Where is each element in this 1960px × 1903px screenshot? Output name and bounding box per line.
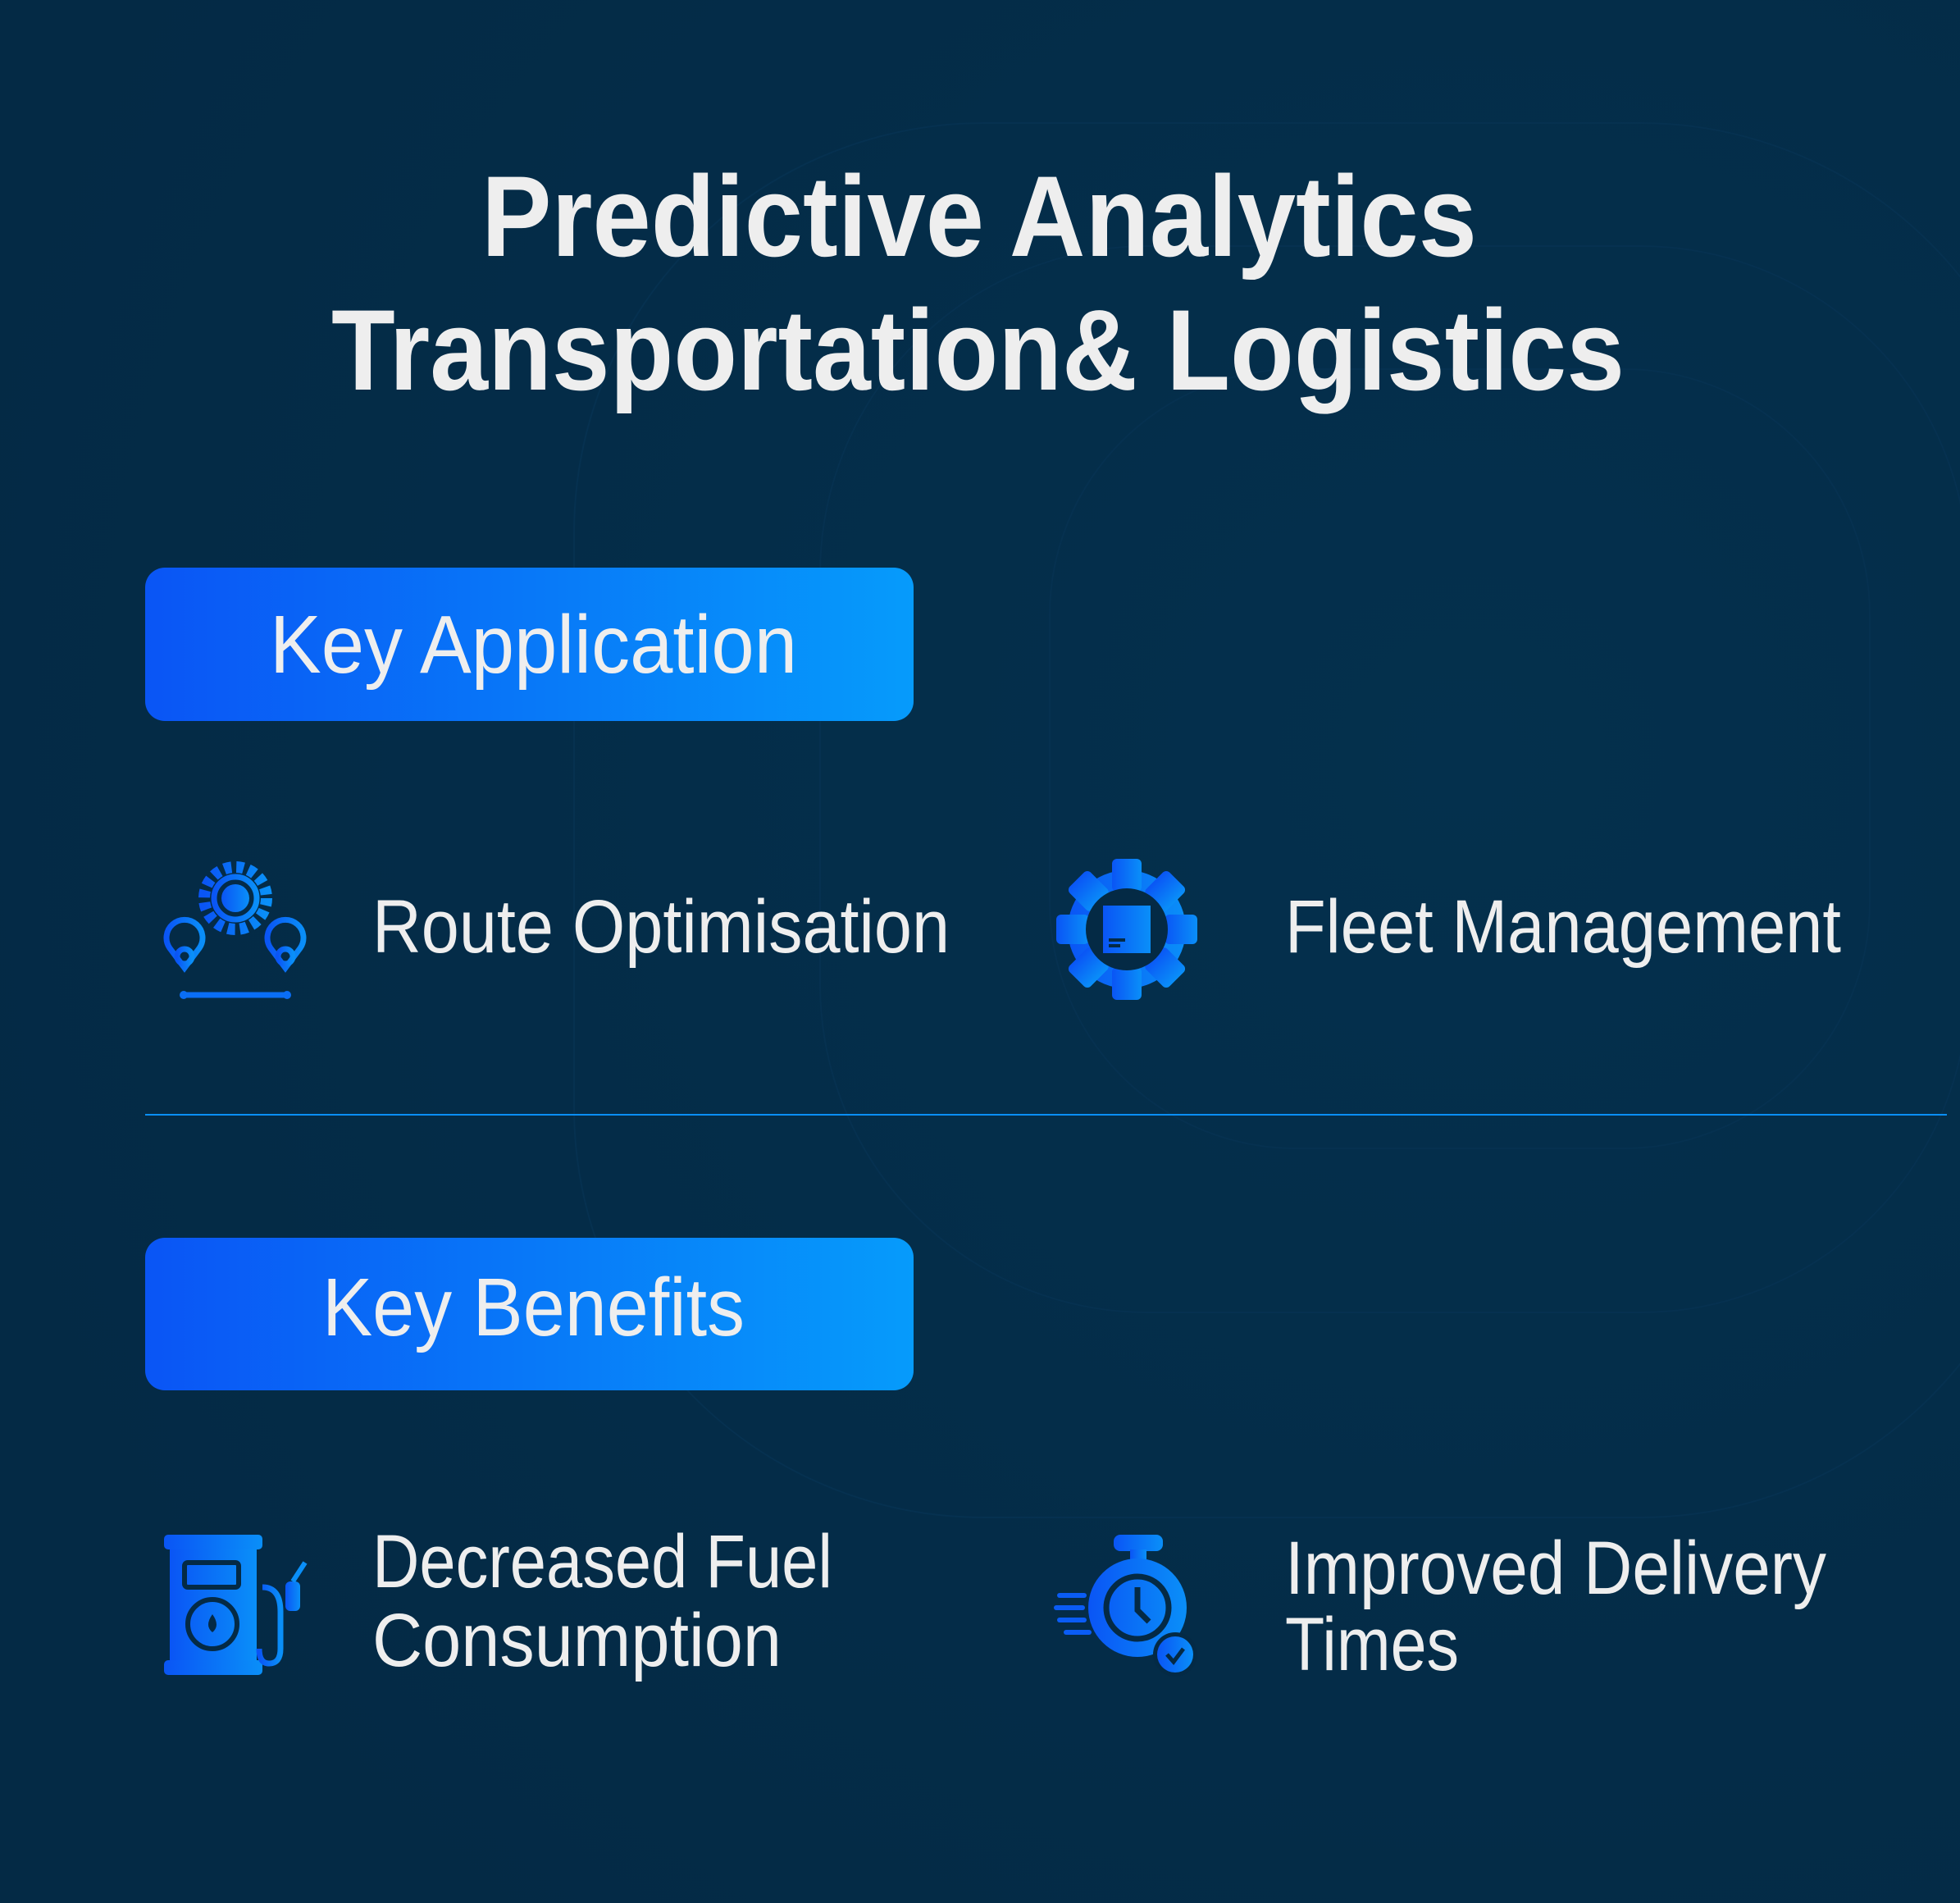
title: Transportation& Logistics bbox=[331, 285, 1625, 414]
text: Improved Delivery Times: Times bbox=[1285, 1603, 1459, 1686]
text: Fleet Management: Fleet Management bbox=[1285, 885, 1841, 969]
icon: stopwatch bbox=[1056, 1535, 1197, 1677]
icon: fleet management gear bbox=[1056, 859, 1197, 1000]
title: Predictive Analytics bbox=[481, 152, 1477, 281]
icon: route optimisation bbox=[166, 867, 303, 999]
text: Decreased Fuel Consumption: Decreased Fuel bbox=[372, 1520, 832, 1604]
text: Improved Delivery Times: Improved Delivery bbox=[1285, 1527, 1826, 1610]
button: Key Benefits: Key Benefits bbox=[322, 1262, 745, 1353]
text: Improved Delivery Times bbox=[1285, 1527, 1826, 1686]
button: Key Application: Key Application bbox=[270, 599, 797, 691]
text: Route Optimisation: Route Optimisation bbox=[372, 885, 950, 969]
text: Decreased Fuel Consumption bbox=[372, 1520, 832, 1682]
button: Key Benefits bbox=[145, 1238, 914, 1390]
text: Decreased Fuel Consumption: Consumption bbox=[372, 1599, 782, 1682]
divider bbox=[145, 1114, 1947, 1116]
icon: fuel pump bbox=[164, 1535, 305, 1675]
title bbox=[331, 152, 1625, 414]
button: Key Application bbox=[145, 568, 914, 721]
